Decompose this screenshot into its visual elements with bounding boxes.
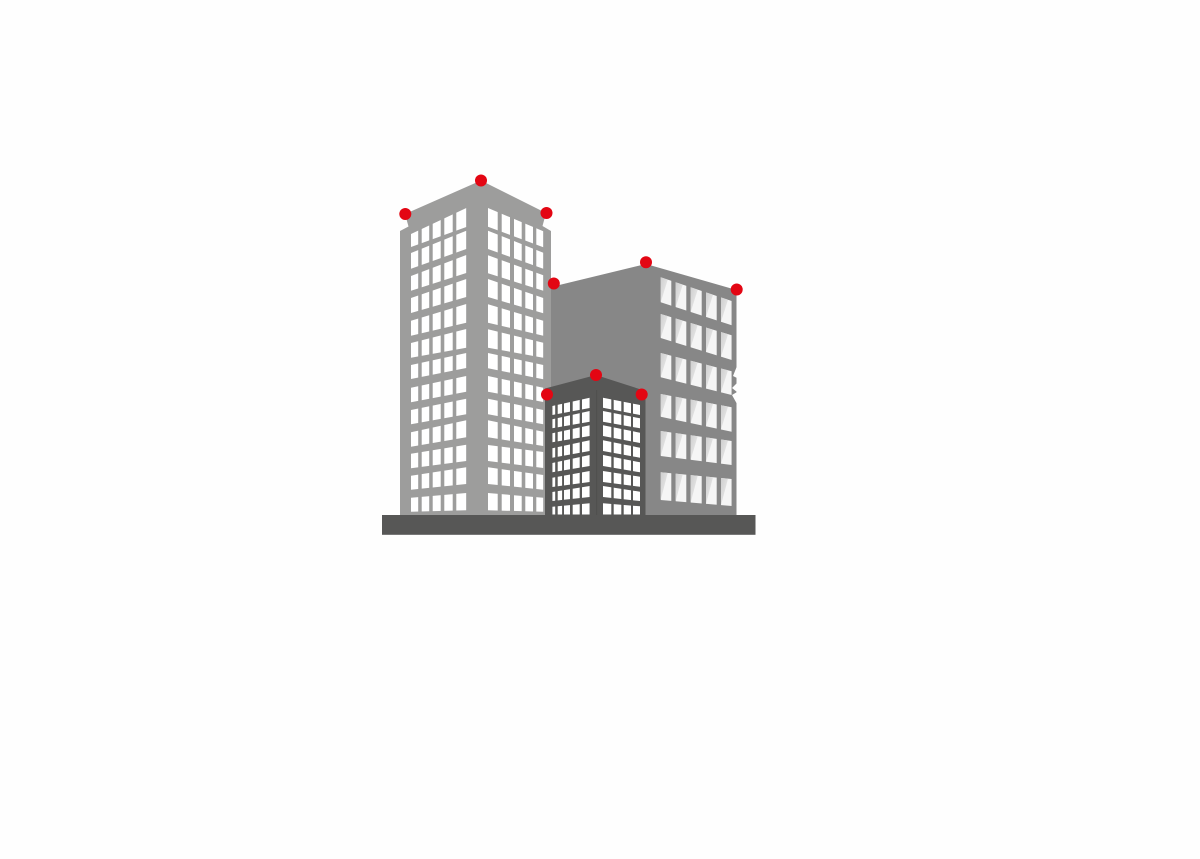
windows: tall tower right face [488,208,543,512]
illustration: group of three office buildings [382,174,756,535]
building: small dark front tower [545,375,646,516]
window reflections: middle block [661,277,728,505]
windows: tall tower left face [411,208,466,512]
windows: middle block panes [661,277,732,506]
white notch on right edge [732,366,737,404]
corner line [596,390,598,515]
building: tall left tower [400,180,551,516]
windows: small tower right face [603,398,640,514]
red location dots [399,174,743,400]
windows: small tower left face [552,398,590,514]
ground base [382,515,756,535]
building: wide middle block [551,264,737,516]
